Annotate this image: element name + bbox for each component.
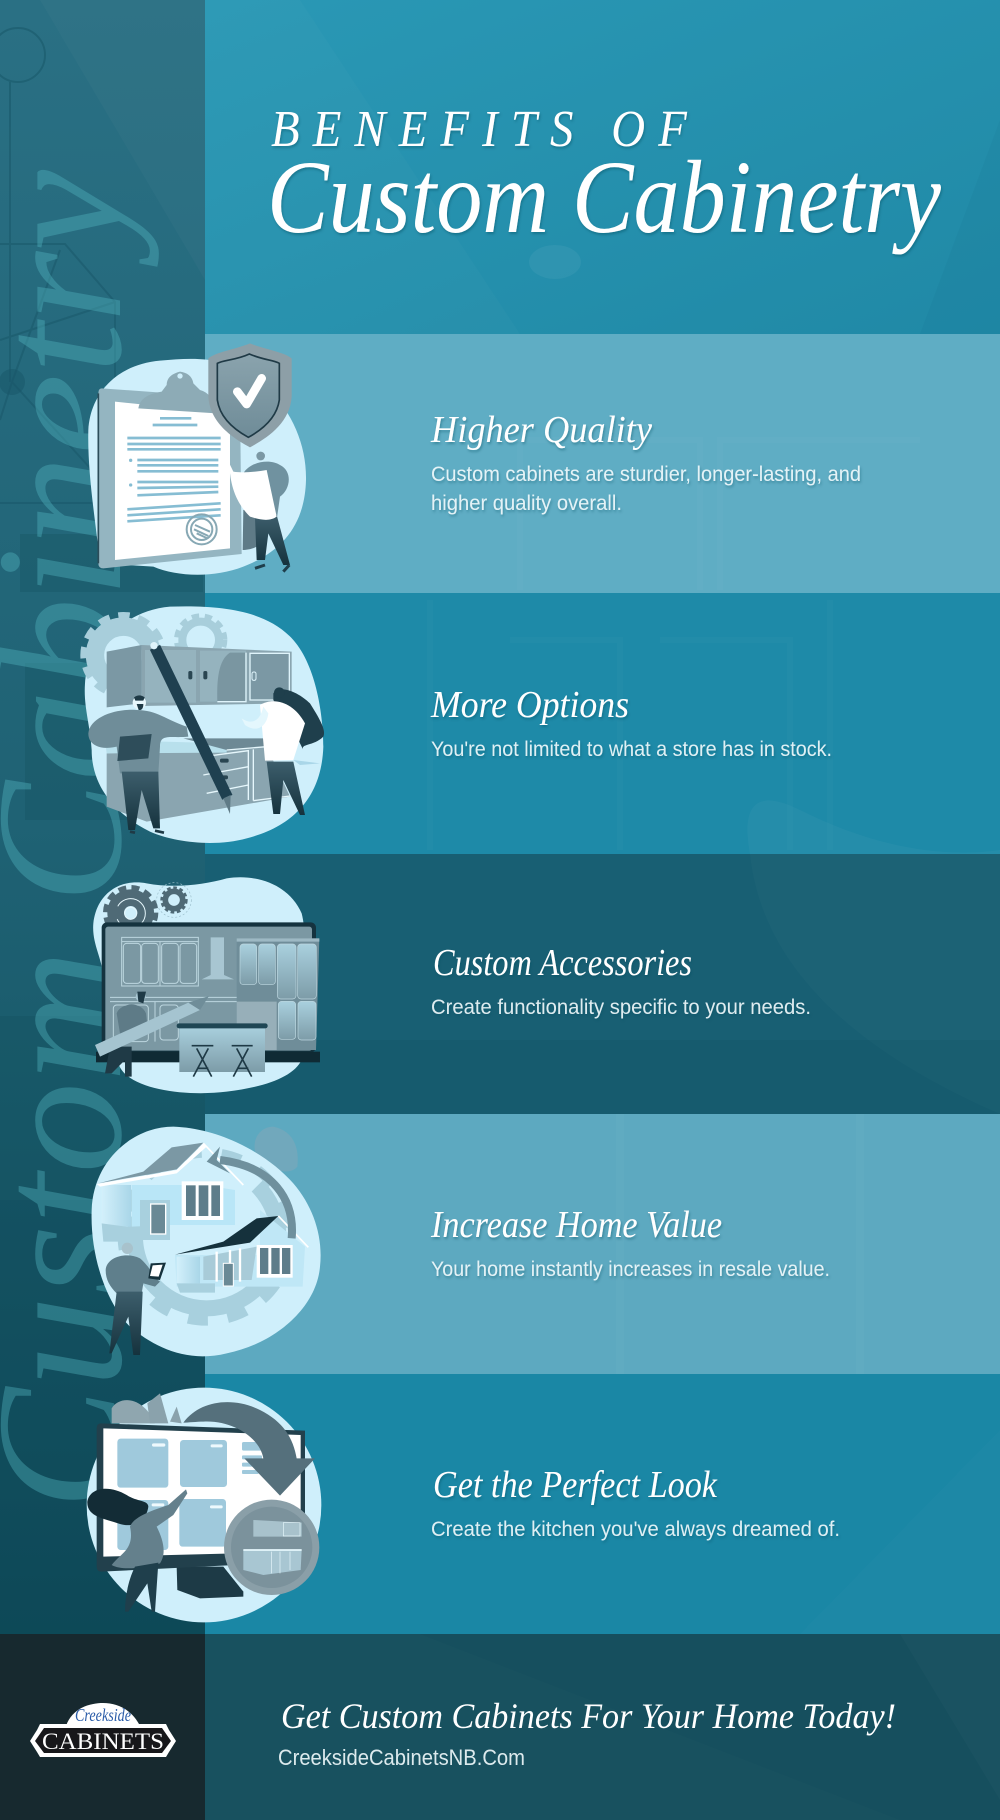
row 2 text: You're not limited to what a store has in stock. xyxy=(431,738,832,761)
row 2 text xyxy=(430,684,832,761)
panel: header background xyxy=(205,0,1000,334)
illustration: perfect look on monitor xyxy=(87,1388,321,1622)
row 1 text: Custom cabinets are sturdier, longer-lasting, and xyxy=(431,463,861,486)
panel: footer background xyxy=(0,1634,1000,1820)
panel: row 4 band xyxy=(205,1114,1000,1374)
row 4 text xyxy=(430,1204,830,1281)
illustration: home value houses xyxy=(92,1127,321,1356)
panel: row 2 band xyxy=(205,593,1000,854)
row 3 text: Custom Accessories xyxy=(433,942,692,984)
title: BENEFITS OF xyxy=(271,100,688,158)
illustration: custom accessories on screen xyxy=(93,877,320,1093)
row 5 text: Get the Perfect Look xyxy=(433,1464,718,1506)
row 1 text xyxy=(430,409,861,515)
row 5 text xyxy=(431,1464,840,1541)
panel: row 3 band xyxy=(205,854,1000,1114)
logo: Creekside Cabinets: CABINETS xyxy=(42,1729,164,1754)
footer call to action: CreeksideCabinetsNB.Com xyxy=(278,1745,525,1770)
panel: row 1 band xyxy=(205,334,1000,593)
row 1 text: higher quality overall. xyxy=(431,492,622,515)
title xyxy=(267,100,942,255)
row 3 text xyxy=(431,942,811,1019)
logo: Creekside Cabinets xyxy=(30,1703,176,1757)
row 4 text: Your home instantly increases in resale value. xyxy=(431,1258,830,1281)
row 3 text: Create functionality specific to your needs. xyxy=(431,996,811,1019)
logo: Creekside Cabinets: Creekside xyxy=(75,1705,131,1725)
footer call to action: Get Custom Cabinets For Your Home Today! xyxy=(281,1696,896,1736)
row 2 text: More Options xyxy=(430,684,629,726)
footer call to action xyxy=(278,1696,896,1770)
panel: row 5 band xyxy=(205,1374,1000,1634)
row 4 text: Increase Home Value xyxy=(430,1204,722,1246)
panel: left column xyxy=(0,0,205,1634)
illustration: kitchen designers with pen xyxy=(84,606,324,843)
row 5 text: Create the kitchen you've always dreamed of. xyxy=(431,1518,840,1541)
illustration: quality checklist and shield xyxy=(88,343,306,575)
row 1 text: Higher Quality xyxy=(430,409,652,451)
